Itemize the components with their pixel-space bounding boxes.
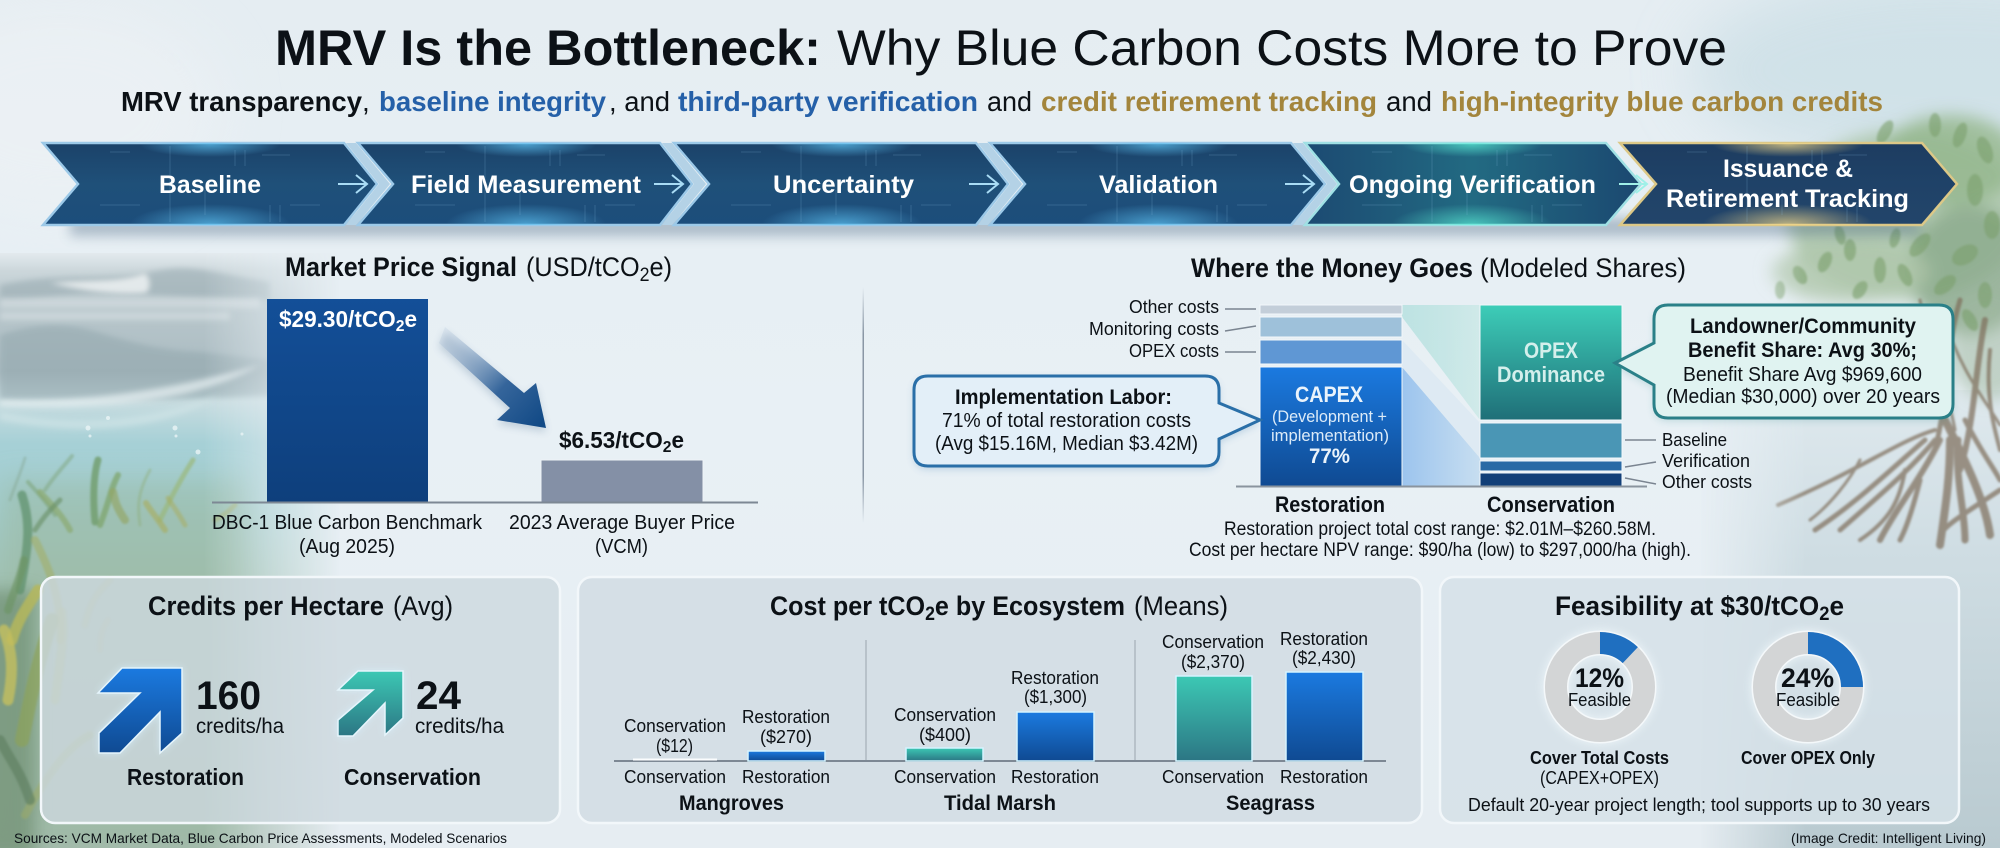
- subtitle: credit retirement tracking: [1041, 86, 1377, 117]
- axis label: Conservation: Conservation: [1487, 492, 1615, 517]
- CAPEX label: CAPEX: [1295, 382, 1363, 407]
- heading: Market Price Signal: e): [650, 252, 672, 282]
- stat: 24 credits/ha: [415, 674, 504, 738]
- group: tidal marsh: Conservation: [894, 766, 996, 787]
- column: conservation: [1480, 305, 1622, 486]
- leaders and labels: restoration: [1089, 296, 1256, 361]
- group: tidal marsh: ($1,300): [1024, 686, 1087, 707]
- label: cover OPEX only: Cover OPEX Only: [1741, 747, 1876, 768]
- CAPEX label: [1271, 382, 1389, 468]
- sources: Sources: VCM Market Data, Blue Carbon Price Assessments, Modeled Scenarios: [14, 830, 507, 846]
- stat: 160 credits/ha: [196, 674, 284, 738]
- subtitle: high-integrity blue carbon credits: [1441, 86, 1883, 117]
- step: Validation: Validation: [1099, 171, 1218, 199]
- process chevrons: [43, 133, 1957, 244]
- stat: 160 credits/ha: credits/ha: [196, 715, 284, 738]
- heading: (Means): [1134, 591, 1228, 621]
- value: $29.30: $29.30/tCO: [279, 306, 398, 332]
- group: tidal marsh: Restoration: [1011, 766, 1099, 787]
- stat: 160 credits/ha: 160: [196, 674, 261, 718]
- group: seagrass: Conservation: [1162, 631, 1264, 652]
- label: DBC-1: (Aug 2025): [299, 536, 395, 558]
- callout: implementation labor: 71% of total restoration costs: [942, 410, 1191, 432]
- heading: Feasibility at $30/tCO: [1555, 591, 1828, 621]
- step: Ongoing Verification: Ongoing Verification: [1349, 171, 1596, 199]
- group: mangroves: ($270): [760, 726, 812, 747]
- group: mangroves: Restoration: [742, 766, 830, 787]
- image credit: (Image Credit: Intelligent Living): [1791, 830, 1986, 846]
- subtitle: MRV transparency: [121, 86, 362, 117]
- step: Baseline: [40, 142, 390, 226]
- group: seagrass: Restoration: [1280, 628, 1368, 649]
- stat: 24 credits/ha: 24: [416, 674, 462, 718]
- step: Baseline: Baseline: [159, 171, 261, 199]
- label: 2023 average: (VCM): [595, 536, 648, 558]
- heading: Market Price Signal: (USD/tCO: [526, 252, 648, 282]
- heading: 2: [1819, 604, 1829, 625]
- bar: 2023 average buyer price: [541, 460, 703, 502]
- title: [275, 20, 1727, 76]
- panel: credits per hectare: [41, 577, 560, 823]
- callout: landowner benefit share: [1615, 305, 1953, 421]
- value: $6.53: 2: [663, 439, 672, 456]
- subtitle: , and: [609, 86, 670, 117]
- donut: 12% feasible: Feasible: [1568, 689, 1631, 710]
- heading: Cost per tCO: [770, 591, 937, 621]
- label: cover total costs: (CAPEX+OPEX): [1540, 767, 1659, 788]
- callout: implementation labor: (Avg $15.16M, Median $3.42M): [935, 433, 1198, 455]
- CAPEX label: implementation): [1271, 426, 1389, 445]
- callout: implementation labor: [914, 376, 1260, 469]
- step: Field Measurement: [356, 142, 706, 226]
- group: seagrass: [1162, 628, 1368, 815]
- OPEX Dominance label: OPEX: [1524, 338, 1578, 363]
- label: 2023 average: [509, 512, 735, 558]
- heading: 2: [925, 604, 935, 625]
- callout: landowner benefit share: Benefit Share Avg $969,600: [1683, 364, 1922, 386]
- donut: 24% feasible: [1764, 643, 1852, 731]
- title: Why Blue Carbon Costs More to Prove: [837, 20, 1727, 76]
- heading: Where the Money Goes: Where the Money Goes: [1191, 253, 1473, 283]
- subtitle: third-party verification: [678, 86, 978, 117]
- step: Uncertainty: Uncertainty: [773, 171, 914, 199]
- label: DBC-1: [212, 512, 483, 558]
- subtitle: ,: [362, 86, 370, 117]
- heading: Market Price Signal: Market Price Signal: [285, 252, 517, 282]
- OPEX Dominance label: [1497, 338, 1605, 387]
- step: Issuance & Retirement Tracking: Issuance &: [1723, 155, 1853, 183]
- callout: implementation labor: Implementation Labor:: [955, 386, 1172, 409]
- icon: restoration arrow: [98, 668, 182, 753]
- callout: landowner benefit share: (Median $30,000) over 20 years: [1666, 386, 1940, 408]
- label: cover total costs: [1530, 747, 1669, 788]
- group: tidal marsh: [894, 667, 1099, 815]
- label: DBC-1: DBC-1 Blue Carbon Benchmark: [212, 512, 483, 534]
- value: $29.30: 2: [396, 318, 405, 335]
- heading: e by Ecosystem: [935, 591, 1125, 621]
- leaders and labels: restoration: Monitoring costs: [1089, 318, 1219, 339]
- leaders and labels: conservation: Other costs: [1662, 471, 1752, 492]
- leaders and labels: conservation: Verification: [1662, 450, 1750, 471]
- heading: Where the Money Goes: (Modeled Shares): [1480, 253, 1686, 283]
- cost range note: Restoration project total cost range: $2.01M–$260.58M.: [1224, 519, 1656, 540]
- subtitle: [121, 86, 1883, 117]
- heading: Credits per Hectare: [148, 591, 384, 621]
- value: $6.53: $6.53/tCO: [559, 427, 665, 453]
- CAPEX label: (Development +: [1272, 407, 1387, 426]
- subtitle: and: [1386, 86, 1432, 117]
- donut: 12% feasible: 12%: [1575, 663, 1624, 693]
- label: cover total costs: Cover Total Costs: [1530, 747, 1669, 768]
- subtitle: and: [987, 86, 1032, 117]
- title: MRV Is the Bottleneck:: [275, 20, 821, 76]
- callout: landowner benefit share: Landowner/Community: [1690, 315, 1916, 338]
- leaders and labels: conservation: [1625, 429, 1752, 492]
- step: Field Measurement: Field Measurement: [411, 171, 642, 199]
- bar chart: market price: [212, 299, 758, 558]
- group: seagrass: Conservation: [1162, 766, 1264, 787]
- panel: cost per tCO2e by ecosystem: [578, 577, 1422, 823]
- stacked bars: where the money goes: [1089, 296, 1752, 517]
- group: mangroves: Restoration: [742, 706, 830, 727]
- heading: Market Price Signal: 2: [640, 265, 650, 286]
- label: Restoration: Restoration: [127, 764, 244, 790]
- subtitle: baseline integrity: [379, 86, 606, 117]
- OPEX Dominance label: Dominance: [1497, 362, 1605, 387]
- group: mangroves: Conservation: [624, 766, 726, 787]
- step: Issuance & Retirement Tracking: [1617, 142, 1958, 226]
- callout: landowner benefit share: Benefit Share: Avg 30%;: [1688, 339, 1917, 362]
- axis label: Restoration: Restoration: [1275, 492, 1385, 517]
- value: $29.30: e: [404, 306, 417, 332]
- group: seagrass: ($2,430): [1292, 647, 1356, 668]
- CAPEX label: 77%: [1309, 445, 1350, 468]
- column: restoration: [1260, 305, 1402, 486]
- heading: [770, 591, 1228, 625]
- label: 2023 average: 2023 Average Buyer Price: [509, 512, 735, 534]
- group: seagrass: Seagrass: [1226, 791, 1315, 815]
- divider: [862, 287, 864, 523]
- icon: conservation arrow: [338, 671, 403, 736]
- group: mangroves: ($12): [656, 735, 693, 756]
- heading: Where the Money Goes: [1191, 253, 1686, 283]
- group: seagrass: Restoration: [1280, 766, 1368, 787]
- note: project length: Default 20-year project length; tool supports up to 30 years: [1468, 794, 1930, 815]
- leaders and labels: conservation: Baseline: [1662, 429, 1727, 450]
- leaders and labels: restoration: OPEX costs: [1129, 340, 1219, 361]
- label: Conservation: Conservation: [344, 764, 481, 790]
- step: Uncertainty: [672, 142, 1022, 226]
- step: Issuance & Retirement Tracking: Retirement Tracking: [1666, 185, 1909, 213]
- step: Validation: [988, 142, 1337, 226]
- group: mangroves: Mangroves: [679, 791, 784, 815]
- cost range note: [1189, 519, 1691, 561]
- heading: Market Price Signal: [285, 252, 672, 286]
- group: tidal marsh: Restoration: [1011, 667, 1099, 688]
- stat: 24 credits/ha: credits/ha: [415, 715, 504, 738]
- donut: 12% feasible: [1556, 643, 1644, 731]
- value: $6.53: e: [671, 427, 684, 453]
- donut: 24% feasible: 24%: [1781, 663, 1834, 693]
- step: Ongoing Verification: [1302, 142, 1648, 226]
- group: tidal marsh: Tidal Marsh: [944, 791, 1056, 815]
- heading: e: [1829, 591, 1844, 621]
- group: mangroves: Conservation: [624, 715, 726, 736]
- arrow: price decline: [439, 327, 546, 432]
- bar: DBC-1 benchmark: [267, 299, 428, 502]
- heading: (Avg): [393, 591, 453, 621]
- panel: feasibility at $30/tCO2e: [1440, 577, 1959, 823]
- cost range note: Cost per hectare NPV range: $90/ha (low) to $297,000/ha (high).: [1189, 540, 1691, 561]
- leaders and labels: restoration: Other costs: [1129, 296, 1219, 317]
- group: tidal marsh: ($400): [919, 724, 971, 745]
- group: mangroves: [624, 706, 830, 815]
- donut: 24% feasible: Feasible: [1776, 689, 1840, 710]
- group: seagrass: ($2,370): [1181, 651, 1245, 672]
- group: tidal marsh: Conservation: [894, 704, 996, 725]
